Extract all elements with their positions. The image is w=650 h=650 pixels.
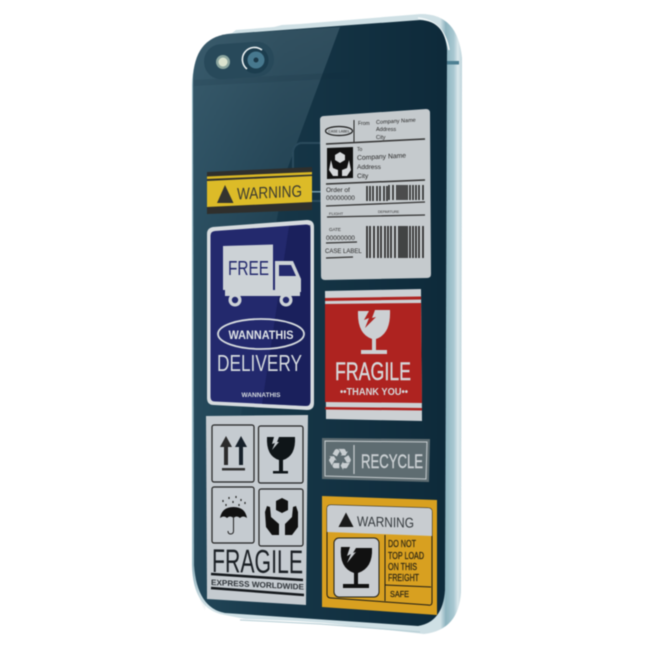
oval logo: CASE LABEL: [328, 130, 350, 134]
icon: warning triangle: [217, 185, 234, 203]
warning header: WARNING: [357, 513, 414, 531]
phone back body: [193, 20, 447, 626]
fragile text: FRAGILE: [335, 358, 411, 386]
sender address: Company Name: [376, 118, 416, 126]
recipient address: Address: [357, 164, 382, 171]
oval brand badge: [218, 319, 304, 349]
icon: handle with care: [327, 147, 353, 179]
camera module: [194, 41, 350, 86]
safe text: SAFE: [390, 589, 409, 599]
icon: lens: [242, 46, 268, 74]
oval logo: [326, 126, 352, 136]
warning instructions: FREIGHT: [388, 573, 419, 584]
recipient address: Company Name: [357, 153, 406, 162]
gate and case fields: 00000000: [326, 235, 355, 242]
fragile wordmark: FRAGILE: [212, 542, 303, 580]
flight fields: FLIGHT: [329, 211, 344, 216]
recipient address: To: [357, 147, 362, 153]
pictogram: handle with care: [259, 489, 303, 546]
label: shipping case label: [320, 109, 431, 280]
fingerprint reader outline: [293, 143, 345, 201]
pictogram: fragile glass: [258, 426, 303, 483]
order number: [326, 187, 355, 202]
recipient address: [357, 147, 406, 180]
sender address: [358, 118, 416, 141]
sender address: City: [376, 135, 386, 141]
warning instructions: DO NOT: [388, 539, 416, 550]
warning text: WARNING: [237, 183, 302, 203]
label: free delivery sign: [207, 220, 314, 410]
label: warning top load: [322, 496, 437, 615]
recipient address: City: [357, 173, 369, 180]
barcode bottom: [367, 226, 423, 258]
sender address: Address: [376, 127, 396, 133]
gate and case fields: GATE: [329, 227, 341, 232]
label: warning strip: [207, 167, 312, 214]
barcode top: [367, 185, 423, 201]
recycle text: RECYCLE: [361, 452, 423, 473]
label: recycle: [322, 438, 430, 482]
sender address: From: [358, 121, 370, 127]
side button: [447, 61, 459, 64]
icon: flash: [216, 55, 230, 69]
glass reflection: [193, 27, 340, 610]
icon: recycle: ♻: [327, 443, 353, 478]
oval brand badge: WANNATHIS: [228, 328, 294, 342]
express worldwide text: EXPRESS WORLDWIDE: [211, 578, 305, 592]
label: fragile handling pictograms: [206, 415, 308, 605]
thank you text: ••THANK YOU••: [340, 386, 408, 398]
label: fragile red: [325, 289, 422, 421]
delivery text: DELIVERY: [217, 350, 302, 376]
clear phone case shell: [192, 14, 462, 634]
pictogram: keep dry: [212, 487, 254, 543]
icon: truck: FREE: [228, 258, 269, 280]
icon: broken glass panel: [334, 538, 379, 597]
icon: truck: [223, 244, 301, 306]
icon: broken glass: [358, 310, 390, 354]
flight fields: [329, 210, 400, 216]
warning instructions: [388, 539, 424, 584]
small brand text: WANNATHIS: [242, 392, 281, 399]
order number: Order of: [326, 187, 350, 194]
pictogram: this way up: [212, 425, 254, 482]
order number: 00000000: [326, 195, 355, 202]
warning instructions: TOP LOAD: [388, 551, 424, 562]
gate and case fields: CASE LABEL: [325, 249, 362, 255]
gate and case fields: [325, 227, 362, 258]
flight fields: DEPARTURE: [378, 210, 400, 214]
warning instructions: ON THIS: [388, 562, 417, 573]
